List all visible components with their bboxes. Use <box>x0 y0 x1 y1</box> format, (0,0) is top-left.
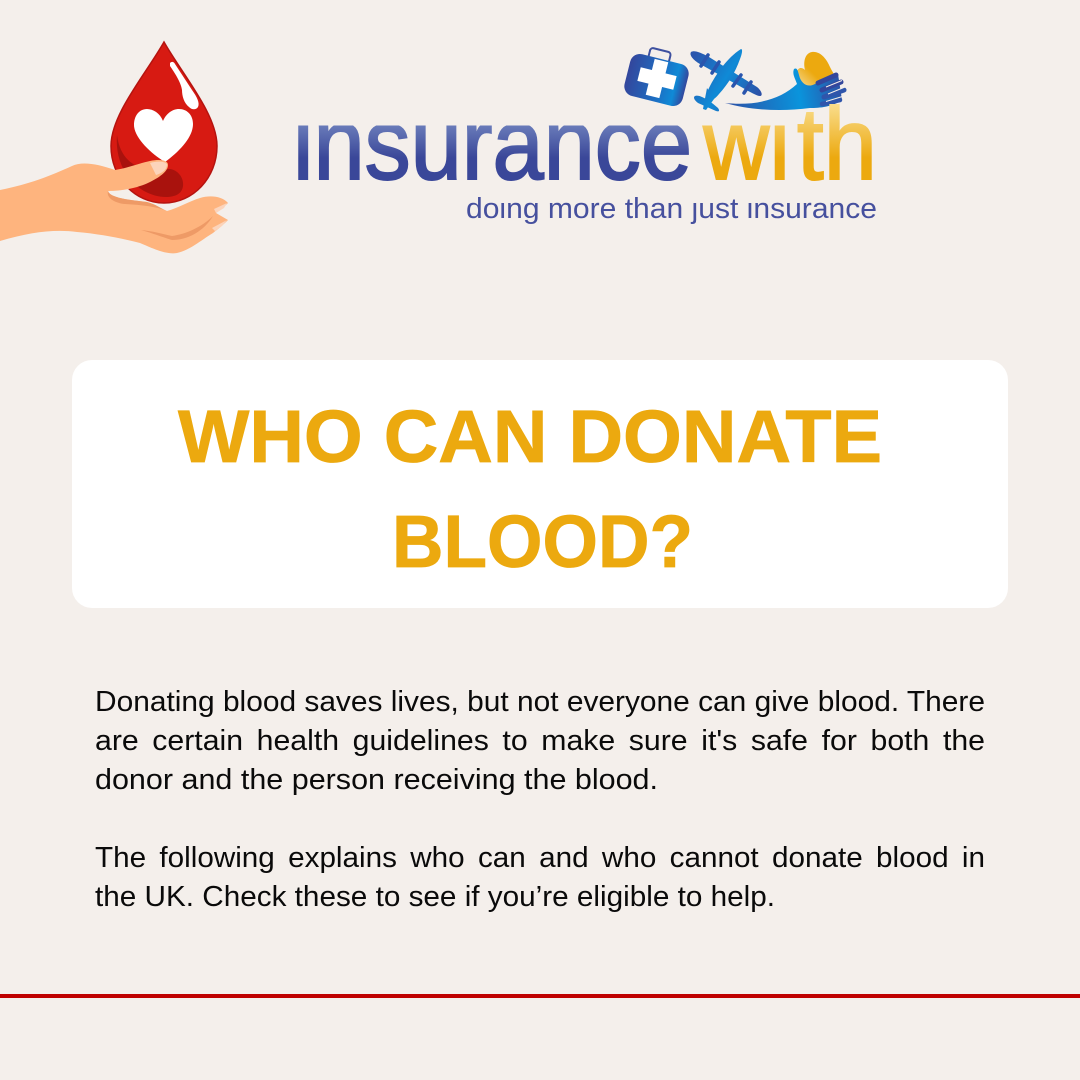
blood drop <box>111 42 217 203</box>
title: BLOOD? <box>392 500 693 583</box>
logo tagline: doing more than just insurance <box>466 193 877 225</box>
logo: insurancewith <box>293 48 877 225</box>
intro text block: donor and the person receiving the blood. <box>95 764 658 796</box>
logo wordmark <box>298 104 872 181</box>
title: WHO CAN DONATE <box>178 395 882 478</box>
logo icon: hand with heart <box>725 52 845 110</box>
logo icon: aeroplane <box>690 49 762 111</box>
title panel <box>72 360 1008 608</box>
intro text block: are certain health guidelines to make sure it's safe for both the <box>95 725 985 757</box>
logo wordmark: th <box>797 87 877 201</box>
intro text block <box>95 686 985 913</box>
logo wordmark: insurance <box>293 87 692 201</box>
title <box>178 395 882 583</box>
intro text block: The following explains who can and who cannot donate blood in <box>95 842 985 874</box>
red divider line <box>0 994 1080 998</box>
icon: blood drop held in a hand <box>0 42 228 253</box>
logo icon: first aid case <box>622 48 691 108</box>
intro text block: the UK. Check these to see if you’re eligible to help. <box>95 881 775 913</box>
logo wordmark: wi <box>702 87 790 201</box>
intro text block: Donating blood saves lives, but not everyone can give blood. There <box>95 686 985 718</box>
hand <box>0 160 228 253</box>
